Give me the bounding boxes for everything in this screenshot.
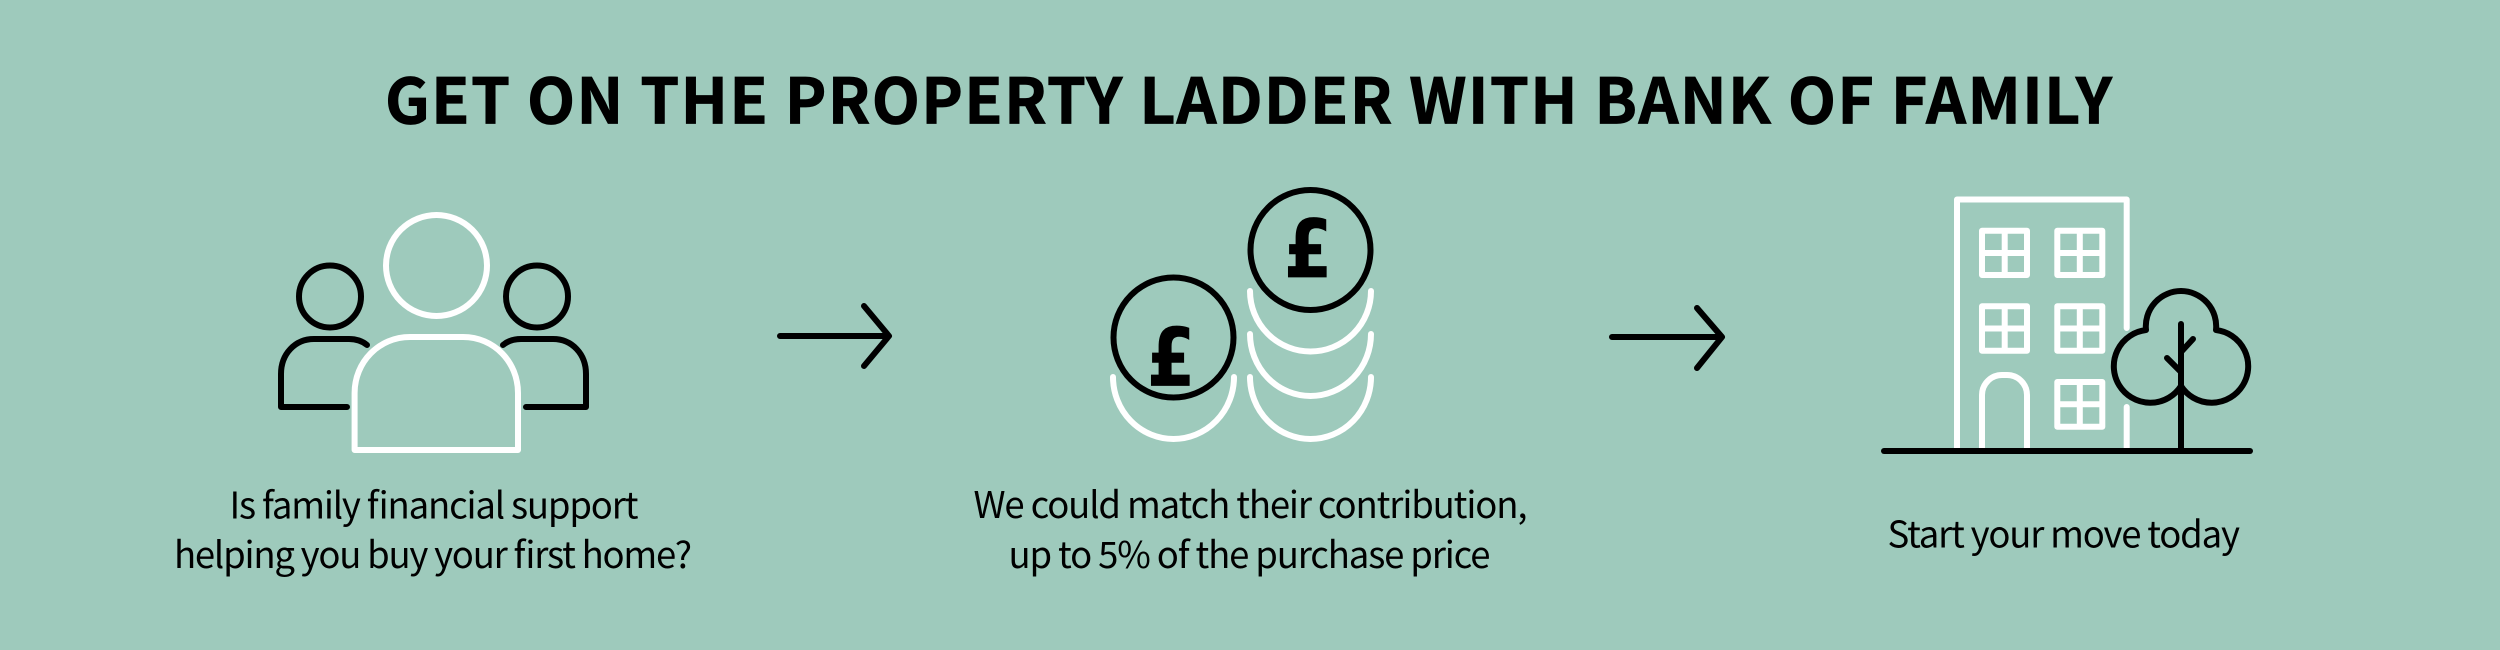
text: step three: Start your move today <box>1888 506 2240 558</box>
right coin: £ <box>1284 203 1332 296</box>
left coin: £ <box>1147 312 1195 405</box>
icon: apartment building with tree <box>1884 200 2250 451</box>
door <box>1982 375 2027 449</box>
text: step one <box>174 476 692 579</box>
arrow: step two to step three <box>1612 308 1722 368</box>
icon: family of three people <box>281 215 586 450</box>
text: step two: up to 5% of the purchase price <box>1008 526 1490 579</box>
icon: pound coins <box>1113 190 1371 439</box>
building outline <box>1957 200 2127 449</box>
text: step one: Is family financial support <box>230 476 639 530</box>
windows <box>1982 231 2102 427</box>
text: step two: We could match their contribution, <box>974 476 1528 529</box>
title: GET ON THE PROPERTY LADDER WITH BANK OF FAMILY <box>385 50 2113 142</box>
left person <box>281 266 367 407</box>
text: step one: helping you buy your first home? <box>174 526 692 579</box>
right coin <box>1250 190 1370 310</box>
white stacked coin edges <box>1113 291 1371 439</box>
text: step two <box>974 476 1528 579</box>
left coin <box>1114 278 1234 405</box>
arrow: step one to step two <box>780 306 889 366</box>
centre person <box>355 215 518 450</box>
right person <box>503 266 586 407</box>
tree <box>2114 291 2248 451</box>
ground line <box>1884 448 2250 454</box>
